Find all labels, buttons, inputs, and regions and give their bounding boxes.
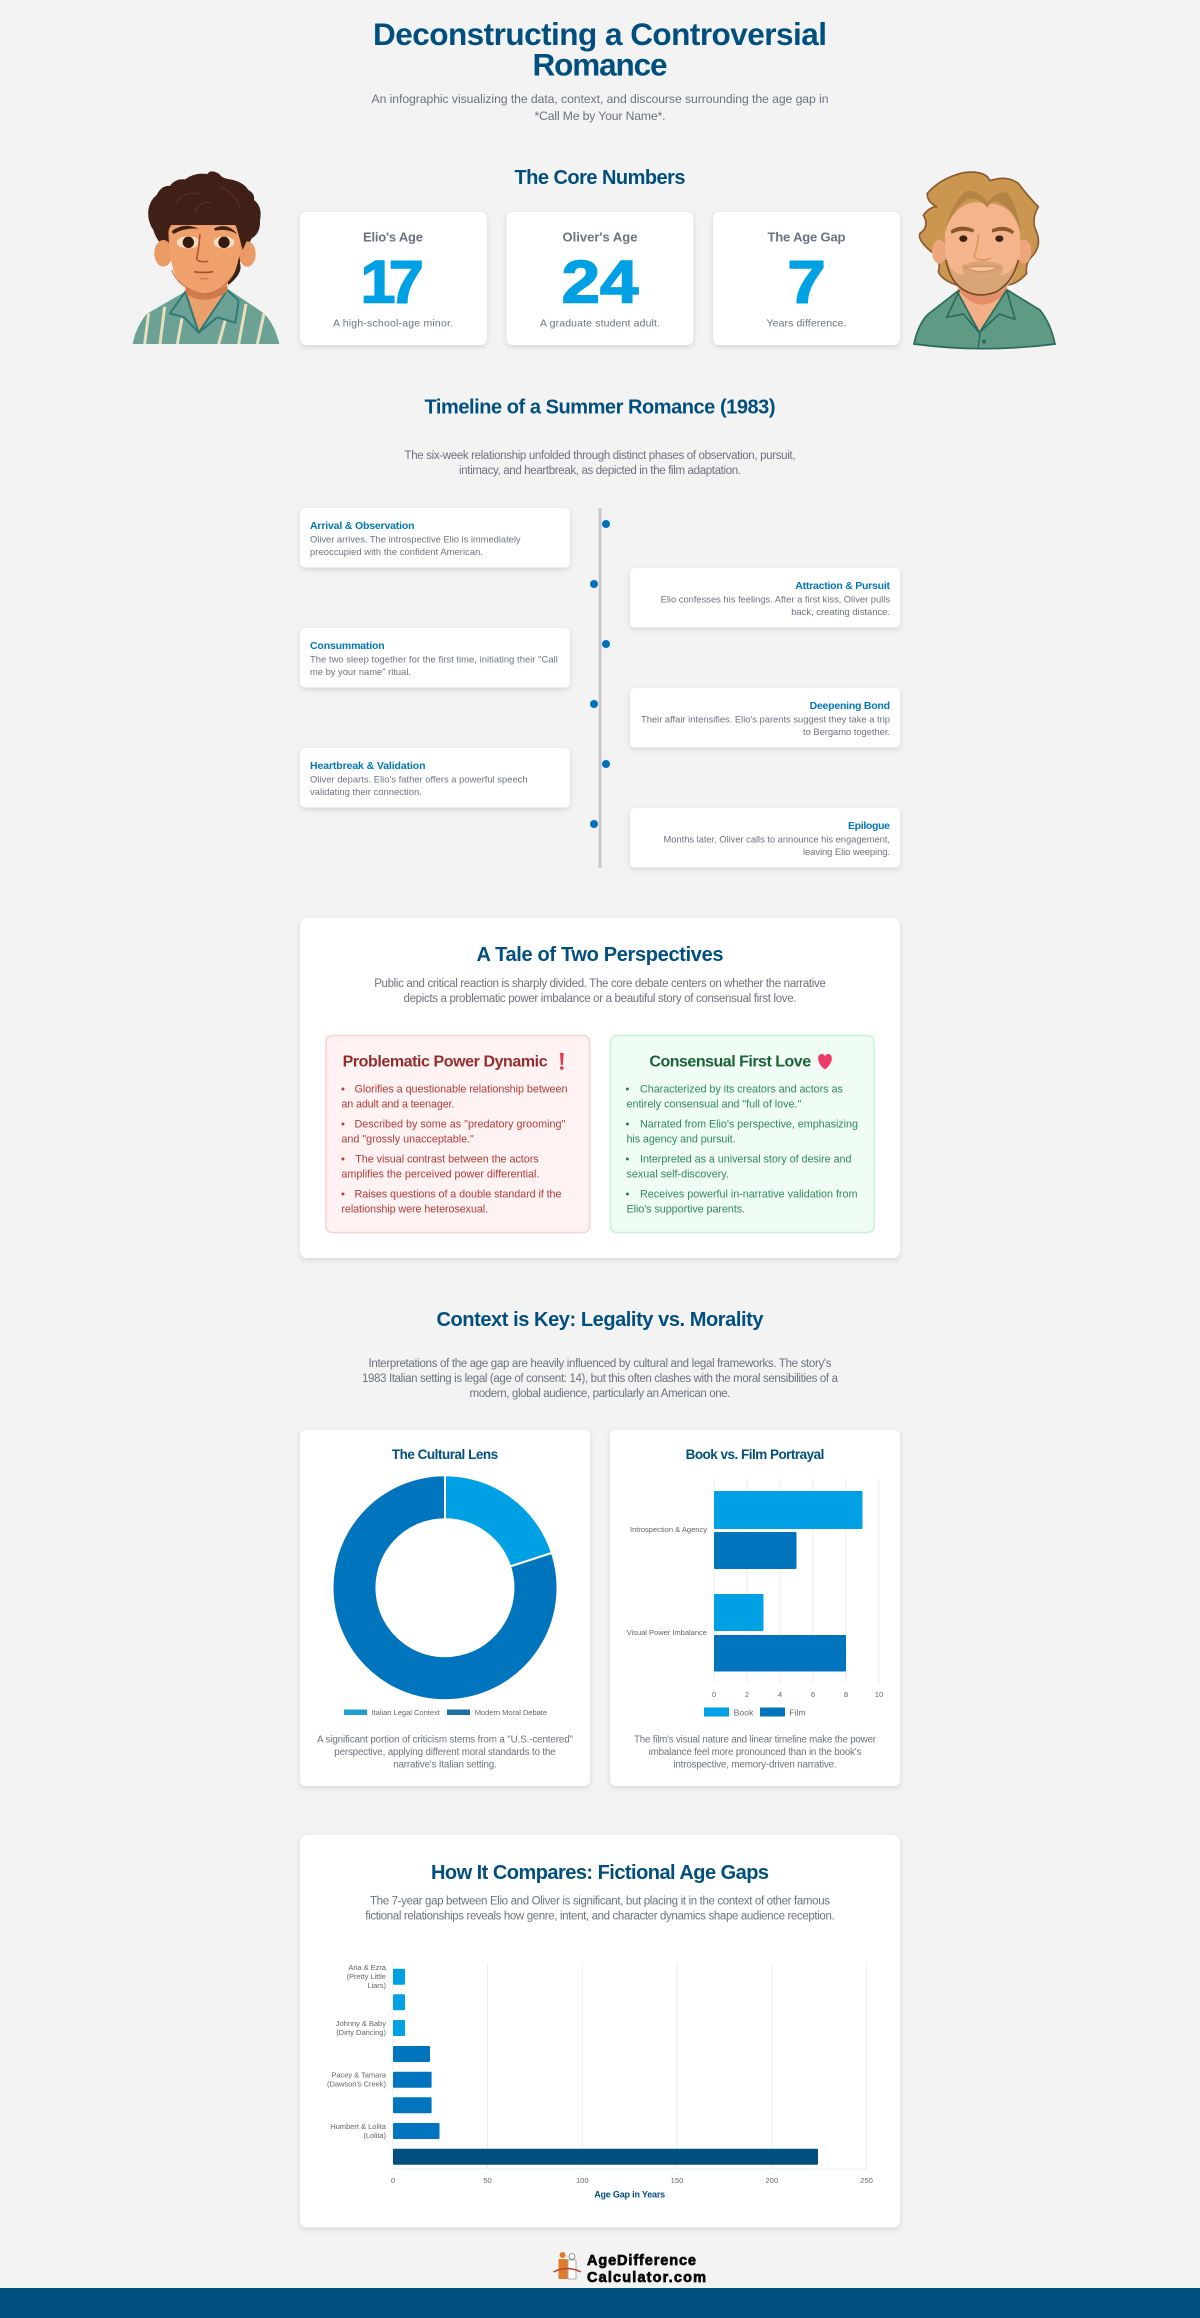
bullet list: •: [626, 1084, 630, 1096]
chart caption: introspective, memory-driven narrative.: [673, 1760, 837, 1770]
chart caption: narrative's Italian setting.: [393, 1760, 497, 1770]
chart heading: The Cultural Lens: [392, 1447, 498, 1462]
heading: context is key: Context is Key: Legality vs. Morality: [436, 1309, 764, 1331]
category labels: [327, 1963, 387, 2140]
bar chart: 6: [811, 1690, 815, 1699]
logo text: AgeDifference: [587, 2253, 696, 2269]
category labels: (Dirty Dancing): [336, 2028, 386, 2037]
event: deepening bond: [590, 688, 900, 748]
intro text: [365, 1896, 835, 1923]
bullet list: sexual self-discovery.: [626, 1168, 729, 1180]
intro text: depicts a problematic power imbalance or a beautiful story of consensual first love.: [404, 993, 796, 1005]
title: Deconstructing a Controversial: [373, 16, 827, 52]
event: epilogue: Months later, Oliver calls to announce his engagement,: [664, 834, 890, 844]
subtitle: [372, 92, 828, 123]
panel: a tale of two perspectives: [300, 918, 900, 1258]
event: consummation: [300, 628, 610, 688]
stat card: the age gap: [713, 212, 900, 345]
bar chart: 10: [875, 1690, 883, 1699]
bullet list: and "grossly unacceptable.": [341, 1134, 474, 1146]
chart legend: [704, 1708, 806, 1718]
bullet list: Described by some as "predatory grooming": [354, 1118, 565, 1130]
bullet list: [626, 1084, 858, 1216]
bullet list: Interpreted as a universal story of desire and: [640, 1154, 852, 1166]
heading: A Tale of Two Perspectives: [476, 944, 724, 966]
event: attraction and pursuit: [590, 568, 900, 628]
logo: age difference calculator: [554, 2252, 706, 2286]
footer band: [0, 2288, 1200, 2318]
subtitle: An infographic visualizing the data, context, and discourse surrounding the age gap in: [372, 92, 828, 106]
event: heartbreak and validation: Heartbreak & Validation: [310, 760, 426, 772]
intro text: fictional relationships reveals how genre, intent, and character dynamics shape audience reception.: [365, 1911, 835, 1923]
heading: timeline: Timeline of a Summer Romance (1983): [424, 396, 776, 418]
bullet list: an adult and a teenager.: [341, 1098, 454, 1110]
stat label: Elio's Age: [363, 230, 423, 244]
event: heartbreak and validation: [300, 748, 610, 808]
context intro: [362, 1358, 839, 1400]
bullet list: •: [341, 1084, 345, 1096]
icon: Elio portrait: [132, 171, 280, 344]
stat number: 17: [360, 249, 424, 316]
context intro: Interpretations of the age gap are heavily influenced by cultural and legal frameworks. The story's: [368, 1358, 832, 1370]
timeline intro: intimacy, and heartbreak, as depicted in the film adaptation.: [459, 465, 741, 477]
category labels: Humbert & Lolita: [330, 2122, 387, 2131]
event: consummation: me by your name" ritual.: [310, 666, 411, 677]
bar chart: 4: [778, 1690, 782, 1699]
stat number: 24: [562, 248, 638, 315]
title: [373, 16, 827, 82]
bullet list: his agency and pursuit.: [626, 1134, 736, 1146]
box: consensual first love: [610, 1036, 874, 1232]
category labels: (Lolita): [364, 2131, 386, 2140]
box heading: Problematic Power Dynamic: [343, 1054, 548, 1070]
chart caption: perspective, applying different moral standards to the: [334, 1747, 556, 1758]
axis ticks: 250: [860, 2176, 873, 2185]
category labels: Pacey & Tamara: [331, 2070, 387, 2080]
event: arrival and observation: [300, 508, 610, 568]
bullet list: Receives powerful in-narrative validation from: [640, 1188, 858, 1200]
event: attraction and pursuit: Attraction & Pursuit: [795, 580, 890, 592]
event: consummation: Consummation: [310, 640, 385, 652]
bullet list: •: [626, 1188, 630, 1200]
bullet list: •: [626, 1118, 630, 1130]
icon: exclamation mark: [560, 1053, 564, 1070]
event: arrival and observation: Arrival & Observation: [310, 520, 414, 532]
chart heading: Book vs. Film Portrayal: [686, 1447, 824, 1462]
axis title: Age Gap in Years: [594, 2190, 665, 2200]
event: consummation: The two sleep together for the first time, initiating their "Call: [310, 654, 558, 664]
intro text: [374, 978, 826, 1005]
category labels: (Pretty Little: [346, 1972, 386, 1981]
panel: book vs. film portrayal: [610, 1430, 900, 1786]
event: epilogue: Epilogue: [848, 820, 890, 832]
timeline: [300, 508, 900, 868]
stat note: Years difference.: [766, 318, 846, 330]
axis ticks: 150: [671, 2176, 683, 2185]
chart legend: Italian Legal Context: [372, 1708, 441, 1717]
stat label: The Age Gap: [768, 230, 846, 244]
bar chart: fictional age gaps: [327, 1963, 873, 2200]
bullet list: relationship were heterosexual.: [341, 1204, 488, 1216]
context intro: 1983 Italian setting is legal (age of consent: 14), but this often clashes with the moral sensibilities of a: [362, 1373, 839, 1385]
box: problematic power dynamic: [326, 1036, 590, 1232]
box heading: Consensual First Love: [649, 1054, 811, 1070]
stat label: Oliver's Age: [562, 230, 638, 244]
axis ticks: [391, 2176, 873, 2185]
event: epilogue: [590, 808, 900, 868]
stat note: A graduate student adult.: [540, 318, 660, 330]
panel: how it compares: [300, 1835, 900, 2228]
event: arrival and observation: preoccupied with the confident American.: [310, 546, 483, 557]
bar chart: Visual Power Imbalance: [627, 1628, 707, 1637]
bullet list: Glorifies a questionable relationship between: [354, 1084, 568, 1096]
event: heartbreak and validation: Oliver departs. Elio's father offers a powerful speech: [310, 774, 528, 784]
donut chart: [333, 1475, 558, 1700]
bar chart: 0: [712, 1690, 716, 1699]
event: deepening bond: Their affair intensifies. Elio's parents suggest they take a trip: [641, 714, 890, 724]
event: attraction and pursuit: Elio confesses his feelings. After a first kiss, Oliver pulls: [661, 594, 890, 604]
timeline intro: [404, 450, 796, 477]
stat number: 7: [787, 248, 826, 315]
axis ticks: 200: [765, 2176, 778, 2185]
event: deepening bond: to Bergamo together.: [803, 726, 890, 737]
bullet list: •: [341, 1188, 345, 1200]
icon: Oliver portrait: [913, 171, 1056, 350]
bar chart: [627, 1479, 883, 1699]
chart legend: Book: [734, 1708, 754, 1718]
chart legend: Film: [789, 1708, 806, 1718]
panel: the cultural lens: [300, 1430, 590, 1786]
event: attraction and pursuit: back, creating distance.: [791, 606, 890, 617]
logo text: Calculator.com: [587, 2270, 706, 2286]
category labels: Aria & Ezra: [348, 1963, 387, 1972]
timeline intro: The six-week relationship unfolded through distinct phases of observation, pursuit,: [404, 450, 796, 462]
stat note: A high-school-age minor.: [333, 318, 453, 330]
intro text: The 7-year gap between Elio and Oliver is significant, but placing it in the context of other famous: [370, 1896, 830, 1908]
event: deepening bond: Deepening Bond: [810, 700, 890, 712]
event: heartbreak and validation: validating their connection.: [310, 786, 422, 797]
bullet list: Raises questions of a double standard if the: [354, 1188, 562, 1200]
event: arrival and observation: Oliver arrives. The introspective Elio is immediately: [310, 534, 521, 544]
bullet list: [341, 1084, 568, 1216]
bullet list: The visual contrast between the actors: [355, 1154, 539, 1166]
stat card: Oliver's age: [507, 212, 693, 345]
intro text: Public and critical reaction is sharply divided. The core debate centers on whether the narrative: [374, 978, 826, 990]
stat card: Elio's age: [300, 212, 487, 345]
event: epilogue: leaving Elio weeping.: [803, 846, 890, 857]
bullet list: •: [341, 1118, 345, 1130]
bar chart: Introspection & Agency: [630, 1525, 707, 1534]
category labels: Liars): [367, 1981, 386, 1990]
chart legend: [344, 1708, 547, 1717]
heading: How It Compares: Fictional Age Gaps: [431, 1862, 769, 1884]
heading: the core numbers: The Core Numbers: [514, 167, 686, 189]
bullet list: Characterized by its creators and actors as: [640, 1084, 843, 1096]
bar chart: 2: [745, 1690, 749, 1699]
chart caption: [634, 1734, 877, 1770]
bullet list: •: [626, 1154, 630, 1166]
chart caption: imbalance feel more pronounced than in the book's: [649, 1747, 861, 1758]
chart legend: Modern Moral Debate: [475, 1708, 547, 1717]
axis ticks: 100: [576, 2176, 589, 2185]
axis ticks: 50: [483, 2176, 492, 2185]
chart caption: [317, 1734, 574, 1770]
category labels: (Dawson's Creek): [327, 2080, 386, 2088]
context intro: modern, global audience, particularly an American one.: [470, 1388, 730, 1400]
axis ticks: 0: [391, 2176, 395, 2185]
subtitle: *Call Me by Your Name*.: [534, 109, 666, 123]
bar chart: 8: [844, 1690, 848, 1699]
chart caption: The film's visual nature and linear timeline make the power: [634, 1734, 877, 1746]
logo text: [587, 2253, 706, 2286]
icon: heart: [818, 1054, 832, 1070]
bullet list: Narrated from Elio's perspective, emphasizing: [640, 1118, 858, 1130]
bullet list: entirely consensual and "full of love.": [626, 1098, 801, 1110]
category labels: Johnny & Baby: [336, 2019, 386, 2028]
icon: two figures: [554, 2252, 581, 2279]
title: Romance: [532, 46, 668, 82]
bullet list: amplifies the perceived power differential.: [341, 1168, 539, 1180]
chart caption: A significant portion of criticism stems from a "U.S.-centered": [317, 1734, 574, 1746]
bullet list: •: [341, 1154, 345, 1166]
bullet list: Elio's supportive parents.: [626, 1204, 745, 1216]
